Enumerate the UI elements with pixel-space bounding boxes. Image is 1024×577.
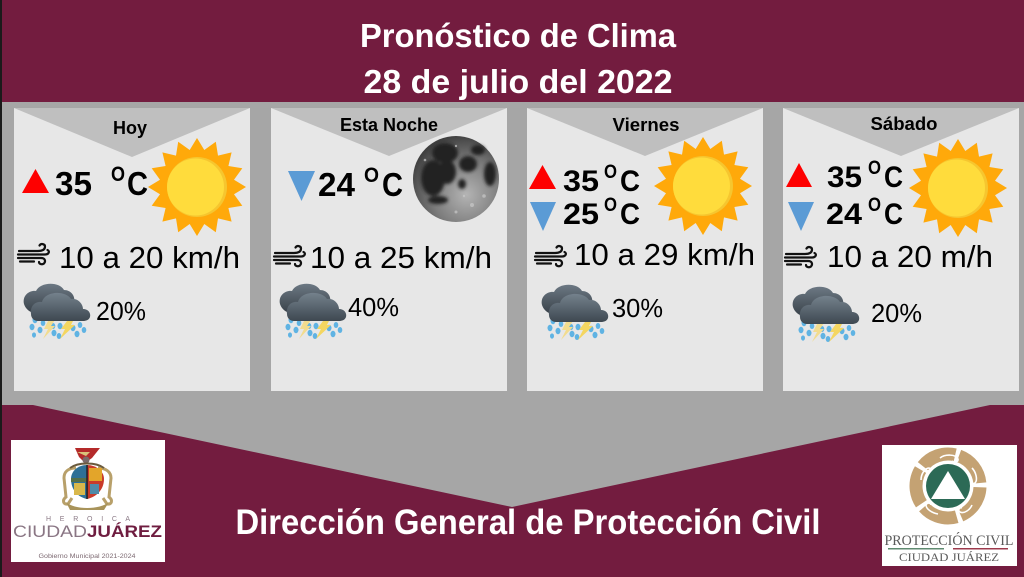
icon: wind: [274, 246, 305, 266]
panel: Hoy: [14, 108, 250, 391]
wind speed: 10 a 20 m/h: [827, 239, 993, 274]
logo: Protección Civil Ciudad Juárez: [882, 445, 1017, 566]
gray forecast band with downward chevron: [2, 102, 1024, 507]
icon: storm cloud: [542, 285, 608, 340]
icon: storm cloud: [280, 284, 346, 339]
logo wordmark: [13, 516, 162, 560]
high temperature: 35: [55, 165, 92, 202]
icon: sun: [909, 139, 1007, 237]
low temperature: 25: [563, 198, 599, 231]
low temperature: C: [884, 198, 903, 231]
day label: Sábado: Sábado: [870, 114, 938, 134]
panel: Sábado: [783, 108, 1019, 391]
panel: Viernes: [527, 108, 763, 391]
emblem: [907, 445, 989, 527]
day label: Hoy: Hoy: [113, 118, 147, 138]
logo wordmark: JUÁREZ: [87, 522, 162, 541]
low temperature: 24: [318, 166, 356, 203]
header chevron: Viernes: [527, 108, 763, 156]
icon: low temperature triangle: [788, 202, 814, 231]
wind speed: 10 a 20 km/h: [59, 240, 240, 275]
header chevron: Sábado: [783, 108, 1019, 156]
rain chance: 30%: [612, 293, 663, 323]
high temperature: C: [884, 161, 903, 194]
header chevron: Esta Noche: [271, 108, 507, 156]
high temperature: 35: [827, 161, 862, 194]
footer heading: Dirección General de Protección Civil: [236, 503, 820, 542]
icon: moon: [413, 136, 499, 222]
logo wordmark: CIUDAD: [13, 522, 87, 541]
panel: Esta Noche: [271, 108, 507, 391]
high temperature: 35: [563, 165, 599, 198]
low temperature: C: [382, 166, 403, 203]
rain chance: 20%: [871, 298, 922, 328]
logo wordmark: CIUDAD JUÁREZ: [899, 550, 999, 564]
crest: [64, 448, 111, 510]
day label: Esta Noche: Esta Noche: [340, 115, 438, 135]
icon: wind: [785, 247, 816, 267]
high temperature: C: [620, 165, 640, 198]
rain chance: 20%: [96, 296, 146, 326]
high temperature: O: [604, 162, 617, 183]
low temperature: C: [620, 198, 640, 231]
icon: high temperature triangle: [529, 165, 556, 189]
rain chance: 40%: [348, 292, 399, 322]
logo wordmark: PROTECCIÓN CIVIL: [884, 532, 1014, 549]
high temperature: C: [127, 165, 148, 202]
icon: storm cloud: [24, 284, 90, 339]
day label: Viernes: Viernes: [612, 115, 680, 135]
wind speed: 10 a 25 km/h: [310, 240, 492, 275]
logo wordmark: H E R O I C A: [46, 516, 130, 523]
icon: low temperature triangle: [530, 202, 556, 231]
header chevron: Hoy: [14, 108, 250, 157]
icon: sun: [654, 137, 752, 235]
icon: wind: [535, 246, 566, 266]
title: [360, 17, 677, 100]
icon: wind: [18, 244, 49, 264]
icon: sun: [148, 138, 246, 236]
low temperature: O: [604, 195, 617, 216]
icon: low temperature triangle: [288, 171, 315, 201]
logo wordmark: Gobierno Municipal 2021-2024: [38, 553, 136, 560]
icon: high temperature triangle: [22, 169, 49, 193]
icon: storm cloud: [793, 287, 859, 342]
high temperature: O: [111, 163, 125, 186]
low temperature: 24: [826, 198, 862, 231]
wind speed: 10 a 29 km/h: [574, 237, 755, 272]
logo wordmark: [884, 532, 1014, 564]
logo: Heroica Ciudad Juárez: [11, 440, 165, 562]
icon: high temperature triangle: [786, 163, 812, 187]
high temperature: O: [868, 158, 881, 179]
title: Pronóstico de Clima: [360, 17, 677, 54]
low temperature: O: [868, 195, 881, 216]
title: 28 de julio del 2022: [364, 63, 672, 100]
low temperature: O: [364, 164, 379, 187]
